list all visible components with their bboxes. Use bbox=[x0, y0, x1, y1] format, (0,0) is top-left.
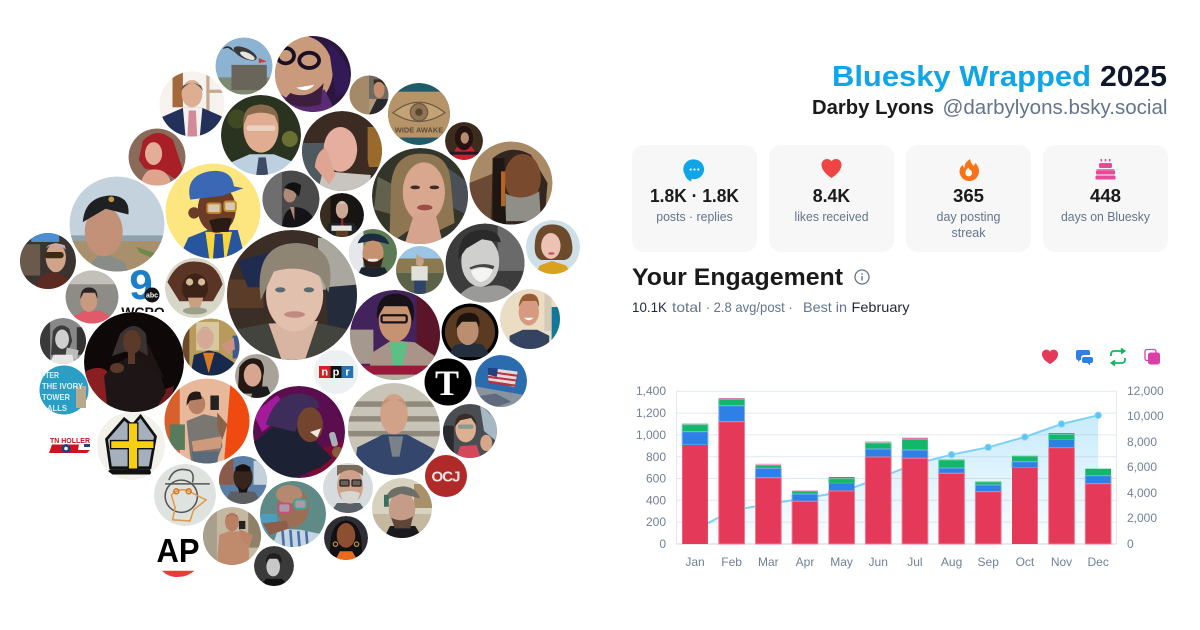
right axis labels: 8,000 bbox=[1127, 435, 1157, 449]
bar: May bbox=[829, 477, 854, 544]
avatar: man in blue puffer jacket bbox=[348, 383, 440, 475]
user name and handle: Darby Lyons bbox=[812, 97, 934, 119]
avatar: OCJ logo bbox=[425, 455, 467, 497]
avatar: TN Holler logo: TN HOLLER bbox=[50, 436, 90, 445]
title: Bluesky Wrapped bbox=[832, 61, 1091, 93]
avatar: cartoon man in UVA cap bbox=[166, 164, 260, 258]
avatar: man with selfie outdoors bbox=[219, 456, 267, 504]
avatar: small dog bbox=[165, 258, 225, 318]
bar: Mar bbox=[756, 464, 781, 544]
right axis labels: 10,000 bbox=[1127, 409, 1164, 423]
bar: Jan bbox=[682, 423, 708, 544]
avatar: channel 9 abc logo bbox=[121, 270, 164, 312]
month labels: Dec bbox=[1088, 555, 1109, 569]
title: 2025 bbox=[1100, 61, 1167, 93]
cumulative line bbox=[695, 415, 1098, 530]
stat card: likes received: likes received bbox=[794, 210, 869, 224]
right axis labels: 6,000 bbox=[1127, 460, 1157, 474]
month labels: Jun bbox=[869, 555, 888, 569]
icon: quotes bbox=[1145, 350, 1160, 364]
icon: chat bubble bbox=[683, 159, 704, 182]
avatar: laughing man, black and white bbox=[446, 224, 524, 302]
avatar: man in cap indoors bbox=[372, 478, 432, 538]
user name and handle bbox=[812, 97, 1168, 119]
right axis labels: 2,000 bbox=[1127, 511, 1157, 525]
left axis labels: 800 bbox=[646, 450, 666, 464]
bar: Jun bbox=[865, 441, 891, 544]
month labels: Nov bbox=[1051, 555, 1072, 569]
avatar: wide awake eye: WIDE AWAKE bbox=[395, 126, 443, 135]
bar: Feb bbox=[719, 398, 744, 544]
icon: replies bbox=[1076, 350, 1093, 366]
stat card: posts and replies bbox=[632, 145, 757, 252]
stat card: day posting streak: 365 bbox=[953, 186, 984, 206]
month labels: Jul bbox=[907, 555, 923, 569]
avatar: main profile, woman with short ash hair bbox=[227, 230, 357, 360]
avatar: New York Times logo bbox=[424, 358, 472, 406]
avatar: man in dark circle portrait bbox=[442, 304, 498, 360]
avatar: man with long dreadlocks bbox=[470, 142, 552, 224]
avatar: TN Holler logo bbox=[49, 436, 90, 453]
avatar: woman with red hair bbox=[128, 128, 186, 186]
bar: Jul bbox=[902, 438, 928, 544]
left axis labels: 200 bbox=[646, 515, 666, 529]
icon: flame bbox=[960, 159, 979, 181]
stat card: likes received bbox=[769, 145, 894, 252]
bar: Oct bbox=[1012, 455, 1038, 544]
avatar: NPR logo: n bbox=[321, 366, 328, 378]
engagement summary: February bbox=[852, 299, 910, 315]
stat card: days on Bluesky: days on Bluesky bbox=[1061, 210, 1151, 224]
stacked bars bbox=[682, 398, 1111, 544]
avatar: After the Ivory Tower Falls book: TOWER bbox=[42, 392, 70, 402]
avatar cluster bbox=[20, 36, 580, 586]
avatar: woman in orange bbox=[324, 516, 368, 560]
stat card: posts and replies: 1.8K · 1.8K bbox=[650, 186, 739, 206]
avatar: NPR logo: r bbox=[345, 366, 350, 378]
cumulative area bbox=[695, 415, 1098, 544]
bar: Sep bbox=[975, 481, 1001, 544]
avatar: yellow cross mitre bbox=[97, 412, 165, 480]
icon: likes bbox=[1042, 350, 1058, 364]
engagement chart bbox=[636, 384, 1164, 569]
avatar: man in sunglasses bbox=[20, 233, 76, 289]
engagement summary: · 2.8 avg/post · bbox=[706, 299, 793, 315]
avatar: channel 9 abc logo: abc bbox=[146, 292, 158, 300]
engagement summary bbox=[632, 299, 910, 315]
month labels: Apr bbox=[796, 555, 814, 569]
engagement summary: total bbox=[672, 299, 702, 315]
chart grid bbox=[676, 391, 1116, 544]
left axis labels: 1,200 bbox=[636, 406, 666, 420]
stat card: days on Bluesky: 448 bbox=[1090, 186, 1121, 206]
stat card: day posting streak: day posting bbox=[936, 210, 1001, 224]
line points bbox=[948, 412, 1101, 458]
avatar: AP logo: AP bbox=[156, 532, 200, 569]
heading: your engagement: Your Engagement bbox=[632, 264, 843, 291]
month labels: Feb bbox=[721, 555, 742, 569]
avatar: blonde woman selfie bbox=[372, 148, 468, 244]
avatar: older man at podium bbox=[320, 193, 364, 237]
avatar: man with grey beard and glasses bbox=[323, 463, 373, 513]
stat card: day posting streak bbox=[906, 145, 1031, 252]
avatar: OCJ logo: OCJ bbox=[432, 468, 460, 486]
left axis labels: 1,000 bbox=[636, 428, 666, 442]
engagement summary: Best in bbox=[803, 299, 847, 315]
month labels: Sep bbox=[978, 555, 999, 569]
avatar: American flag painting bbox=[475, 355, 527, 407]
avatar: senator pointing bbox=[182, 318, 240, 376]
avatar: After the Ivory Tower Falls book: ALLS bbox=[47, 403, 67, 413]
avatar: bearded man in cap bbox=[349, 229, 397, 277]
avatar: dark-haired person in blazer bbox=[262, 170, 320, 228]
avatar: man in suit with pink tie bbox=[160, 72, 224, 136]
avatar: speaker with mic on purple stage bbox=[253, 386, 345, 478]
right axis labels: 4,000 bbox=[1127, 486, 1157, 500]
avatar: After the Ivory Tower Falls book bbox=[40, 366, 88, 414]
icon: heart bbox=[821, 159, 842, 178]
month labels: May bbox=[830, 555, 853, 569]
right axis labels bbox=[1127, 384, 1164, 551]
avatar: woman in red on TV bbox=[445, 122, 483, 160]
stat card: likes received: 8.4K bbox=[813, 186, 850, 206]
avatar: man with glasses and green lanyard on TV bbox=[350, 290, 440, 380]
right axis labels: 12,000 bbox=[1127, 384, 1164, 398]
avatar: After the Ivory Tower Falls book: THE IVORY bbox=[42, 381, 83, 391]
avatar: After the Ivory Tower Falls book: FTER bbox=[41, 370, 59, 380]
bar: Apr bbox=[792, 490, 818, 544]
avatar: whiteboard drawing bbox=[154, 464, 216, 526]
avatar: channel 9 abc logo: 9 bbox=[129, 261, 153, 308]
avatar: man with cap at beach bbox=[70, 176, 164, 272]
month labels: Oct bbox=[1016, 555, 1035, 569]
right axis labels: 0 bbox=[1127, 537, 1134, 551]
left axis labels: 400 bbox=[646, 494, 666, 508]
avatar: man on stairs bbox=[66, 270, 118, 324]
avatar: wide awake eye bbox=[388, 83, 450, 145]
avatar: woman in black dress bbox=[84, 312, 184, 412]
month labels: Aug bbox=[941, 555, 962, 569]
avatar: woman with glasses waving in car bbox=[443, 404, 497, 458]
month labels: Mar bbox=[758, 555, 779, 569]
avatar: woman in black and white bbox=[40, 318, 86, 364]
user name and handle: @darbylyons.bsky.social bbox=[942, 97, 1168, 119]
icon: reposts bbox=[1111, 348, 1125, 366]
stat card: day posting streak: streak bbox=[952, 226, 986, 240]
icon: birthday cake bbox=[1096, 159, 1116, 180]
stat card: days on Bluesky bbox=[1043, 145, 1168, 252]
avatar: smiling blond man bbox=[500, 289, 560, 349]
avatar: woman with curly hair and yellow top bbox=[526, 220, 580, 274]
engagement summary: 10.1K bbox=[632, 299, 668, 315]
avatar: man with glasses, purple light bbox=[272, 36, 351, 112]
bar: Dec bbox=[1085, 469, 1111, 544]
avatar: man and cat bbox=[350, 76, 388, 114]
stat card: posts and replies: posts · replies bbox=[656, 210, 733, 224]
left axis labels bbox=[636, 384, 666, 551]
left axis labels: 600 bbox=[646, 472, 666, 486]
avatar: woman resting head on hand bbox=[302, 111, 382, 191]
avatar: woman taking mirror selfie bbox=[164, 378, 250, 464]
month labels bbox=[685, 555, 1109, 569]
chart legend bbox=[1042, 348, 1160, 366]
avatar: shirtless man in mirror selfie bbox=[203, 507, 261, 565]
avatar: New York Times logo: T bbox=[435, 363, 459, 403]
month labels: Jan bbox=[685, 555, 705, 569]
avatar: NPR logo: p bbox=[333, 366, 340, 378]
left axis labels: 0 bbox=[659, 537, 666, 551]
avatar: woman with colourful glasses bbox=[260, 481, 326, 547]
avatar: smiling woman bbox=[235, 354, 279, 398]
avatar: man standing at ruins bbox=[396, 246, 444, 294]
avatar: NPR logo bbox=[314, 350, 358, 394]
avatar: man with glasses and tie bbox=[221, 95, 301, 175]
avatar: channel 9 abc logo: WCPO bbox=[121, 304, 165, 320]
icon: info bbox=[855, 270, 869, 284]
avatar: bird on rock bbox=[216, 38, 272, 94]
bar: Aug bbox=[939, 459, 964, 544]
avatar: man in black and white bbox=[254, 546, 294, 586]
bar: Nov bbox=[1049, 433, 1074, 544]
left axis labels: 1,400 bbox=[636, 384, 666, 398]
